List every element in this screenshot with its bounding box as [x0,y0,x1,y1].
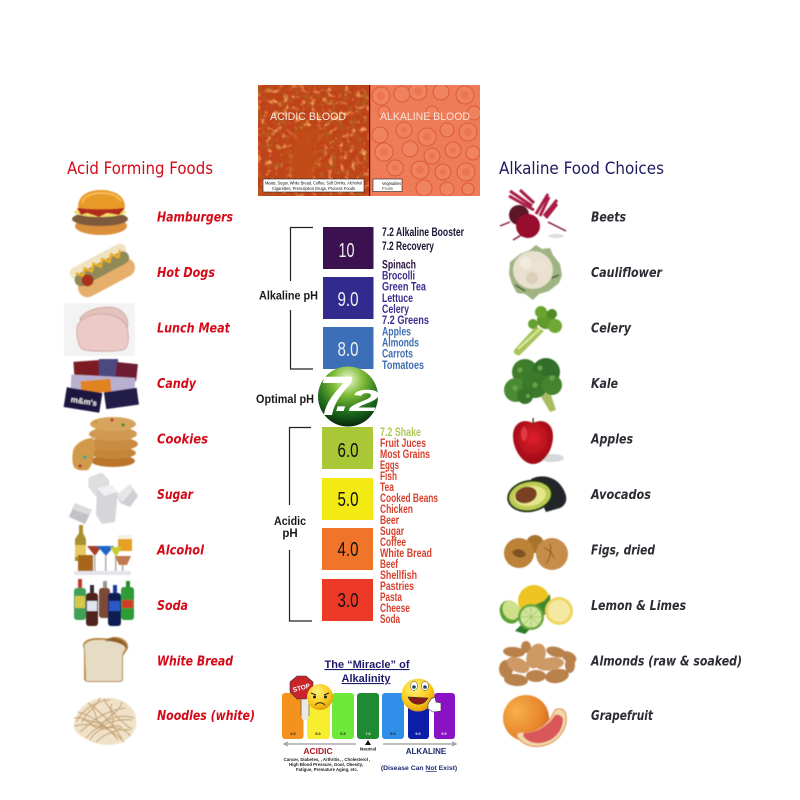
label: alkaline: ALKALINE [406,747,447,756]
label: neutral: Neutral [360,746,376,752]
pH color bars: 7.0 [365,732,371,736]
text: diseases: Fatigue, Premature Aging, etc. [296,767,358,772]
item: Celery [382,304,409,316]
item: 7.2 Shake [380,427,421,439]
label: acidic pH: Acidic [274,516,307,528]
item: Pasta [380,592,402,604]
icon: candy bars [64,359,139,413]
block: pH 5.0 [322,478,373,520]
icon: white bread [83,637,128,682]
label: grapefruit: Grapefruit [591,709,654,724]
icon: kale [504,358,562,412]
acidic blood photo [258,85,369,196]
icon: almonds [499,640,578,687]
item: Fish [380,471,397,483]
item: Brocolli [382,270,415,282]
label: hamburgers: Hamburgers [157,210,233,226]
label: alcohol: Alcohol [156,544,204,558]
label: soda: Soda [157,599,188,614]
label: acidic blood: ACIDIC BLOOD [270,111,346,123]
heading: alkaline food choices: Alkaline Food Choices [499,159,664,179]
pH color bars: 5.0 [315,732,321,736]
label: beets: Beets [591,210,626,226]
icon: 7.2 logo sphere: 7 [319,364,353,427]
label: cookies: Cookies [157,432,208,448]
block: pH 6.0: 6.0 [338,440,358,462]
label: alkaline blood: ALKALINE BLOOD [380,111,470,123]
pH color bars [282,693,455,739]
block: pH 10: 10 [338,240,354,262]
icon: lunch meat [64,303,135,356]
title [325,659,410,685]
label: alkaline pH: Alkaline pH [259,290,318,302]
icon: happy smiley [402,678,441,712]
label: lunch meat: Lunch Meat [157,322,231,336]
item: Most Grains [380,449,430,461]
pH color bars: 8.5 [390,732,396,736]
label: candy: Candy [157,377,196,392]
item: Lettuce [382,293,413,305]
icon: 7.2 logo sphere: .2 [335,383,379,418]
caption: acidic causes: Cigarettes, Prescription Drugs, Process Foods [272,186,356,191]
item: Sugar [380,526,404,538]
label: celery: Celery [591,322,631,336]
item: Cooked Beans [380,493,438,505]
bracket: acidic [290,428,312,621]
icon: 7.2 logo sphere [318,364,379,427]
pH color bars: 6.5 [340,732,346,736]
label: sugar: Sugar [157,488,194,503]
icon: red apple [513,418,564,464]
label: figs: Figs, dried [591,544,656,558]
label: optimal pH: Optimal pH [256,394,314,406]
item: Pastries [380,581,414,593]
heading: acid forming foods: Acid Forming Foods [67,159,213,179]
pH color bars: 9.0 [415,732,421,736]
pH color bars: 9.5 [441,732,447,736]
icon: dried figs [504,535,568,570]
item: Beer [380,515,399,527]
label: noodles: Noodles (white) [157,709,255,724]
item: Apples [382,326,411,338]
text: diseases [284,757,370,772]
item: Beef [380,559,398,571]
label: acidic pH [274,516,307,540]
alkaline food list [382,227,464,372]
icon: stop sign: STOP [292,683,312,694]
alkaline blood photo [370,82,481,196]
icon: cookies [72,417,138,470]
left food list [156,210,255,724]
icon: soda bottles [74,579,134,626]
item: Carrots [382,348,413,360]
item: White Bread [380,548,432,560]
item: 7.2 Recovery [382,241,434,253]
block: pH 3.0 [322,579,373,621]
item: Spinach [382,260,416,272]
item: Eggs [380,460,399,472]
title: The “Miracle” of [325,659,410,671]
icon: hamburger [72,190,128,235]
item: Green Tea [382,282,426,294]
block: pH 9.0 [323,277,374,319]
arrow: alkaline direction [383,742,456,746]
block: pH 3.0: 3.0 [338,590,358,612]
icon: candy bars: m&m's [70,395,98,408]
block: pH 4.0: 4.0 [338,539,358,561]
neutral marker [365,740,371,745]
label: lemon and limes: Lemon & Limes [591,599,686,614]
caption: alkaline sources: Vegetables [382,181,402,186]
text: diseases: High Blood Pressure, Gout, Obesity, [289,762,363,767]
acidic food list [380,427,438,626]
label: hot dogs: Hot Dogs [157,266,215,281]
block: pH 6.0 [322,427,373,469]
item: Soda [380,614,400,626]
label: white bread: White Bread [157,654,234,670]
pH scale [256,227,379,621]
caption: acidic causes [263,179,364,192]
label: almonds: Almonds (raw & soaked) [590,654,742,670]
item: Coffee [380,537,406,549]
icon: white noodles [74,698,136,745]
panel: miracle of alkalinity [282,659,457,772]
label: acidic: ACIDIC [303,746,333,756]
pH color bars: 4.5 [290,732,296,736]
block: pH 8.0 [323,327,374,369]
item: Tomatoes [382,360,424,372]
block: pH 8.0: 8.0 [338,339,358,361]
icon: celery [514,306,562,355]
block: pH 10 [323,227,374,269]
item: 7.2 Greens [382,315,429,327]
block: pH 4.0 [322,528,373,570]
icon: sugar cubes [69,473,138,524]
icon: hot dog [68,241,138,301]
caption: alkaline sources: Fruits [382,186,394,191]
caption: acidic causes: Meats, Sugar, White Bread, Coffee, Soft Drinks, Alchohol [265,180,362,186]
label: avocados: Avocados [590,488,651,503]
icon: beets [500,190,566,240]
item: 7.2 Alkaline Booster [382,227,464,239]
photo divider [369,85,370,196]
arrow: acidic direction [284,742,356,746]
block: pH 9.0: 9.0 [338,289,358,311]
icon: grapefruit [503,695,566,746]
icon: lemon and limes [496,585,573,634]
block: pH 5.0: 5.0 [338,489,358,511]
label: acidic pH: pH [282,528,298,540]
label: kale: Kale [591,377,618,392]
bracket: alkaline [290,228,313,369]
right food list [590,210,742,724]
caption: alkaline sources [373,179,402,192]
item: Shellfish [380,570,417,582]
icon: avocado [505,476,566,516]
icon: alcohol [74,525,132,575]
text: diseases: Cancer, Diabetes, , Arthritis, , Cholesterol , [284,757,370,762]
item: Chicken [380,504,413,516]
item: Tea [380,482,394,494]
icon: cauliflower [509,245,562,300]
icon: worried smiley [307,684,333,710]
item: Almonds [382,338,419,350]
icon: stop sign [290,676,313,717]
text: disease can not exist: (Disease Can Not Exist) [381,765,457,772]
panel: blood comparison photo [258,82,481,196]
item: Fruit Juces [380,438,426,450]
item: Cheese [380,603,410,615]
label: cauliflower: Cauliflower [591,266,663,281]
label: apples: Apples [590,432,633,448]
title: Alkalinity [342,673,391,685]
